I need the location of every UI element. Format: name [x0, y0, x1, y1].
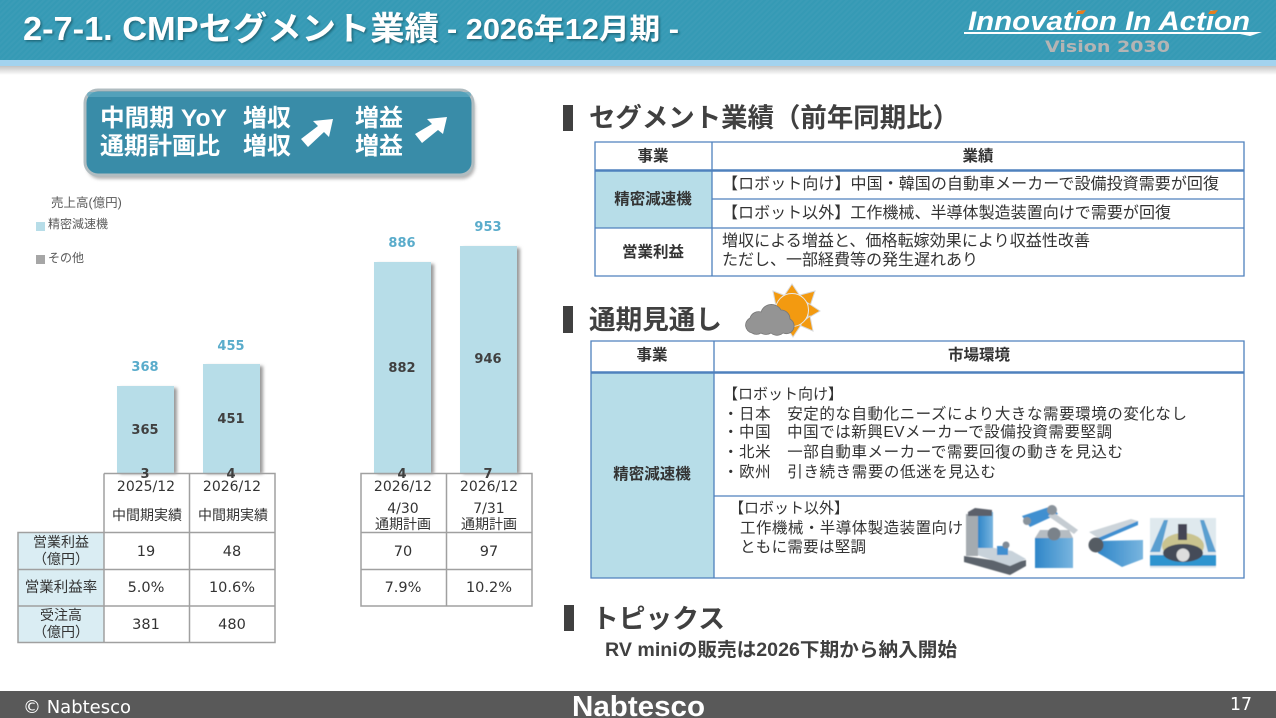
- chart legend: その他: [48, 251, 84, 265]
- table: segment results: 業績: [962, 147, 994, 165]
- footer: 17: [1230, 694, 1252, 715]
- bar chart: full-year plans: 886: [388, 236, 416, 251]
- table: right plans: 2026/12: [374, 479, 432, 495]
- heading: topics: トピックス: [592, 604, 725, 634]
- bar small values: 4: [226, 467, 236, 482]
- table: left results: 10.6%: [209, 580, 255, 596]
- table: right plans: 2026/12: [460, 479, 518, 495]
- bar chart: full-year plans: 953: [474, 220, 502, 235]
- callout: summary of YoY and plan comparison: 増益: [355, 133, 403, 160]
- table: right plans: 通期計画: [375, 516, 431, 532]
- table: right plans: [361, 474, 532, 606]
- table: market environment: 【ロボット向け】: [723, 386, 843, 403]
- table: market environment: 事業: [636, 345, 668, 364]
- table: segment results: [595, 142, 1244, 276]
- bar small values: 7: [483, 467, 493, 482]
- table: segment results: 増収による増益と、価格転嫁効果により収益性改善: [722, 232, 1090, 250]
- heading: full-year outlook: 通期見通し: [589, 305, 722, 335]
- table: market environment: [591, 341, 1244, 578]
- table: left results: 480: [218, 617, 246, 633]
- footer: © Nabtesco: [23, 697, 131, 718]
- table: left results: 中間期実績: [198, 507, 268, 523]
- bar chart: actuals: 451: [217, 412, 245, 427]
- callout: summary of YoY and plan comparison: 中間期 YoY: [100, 105, 227, 132]
- table: left results: [18, 474, 275, 642]
- bar chart: full-year plans: [374, 220, 520, 474]
- table: left results: （億円）: [33, 551, 89, 567]
- table: right plans: 7/31: [473, 501, 505, 517]
- table: left results: 営業利益: [33, 534, 89, 550]
- chart legend: [36, 195, 122, 265]
- heading: segment results: セグメント業績（前年同期比）: [589, 103, 959, 133]
- table: left results: 48: [223, 544, 241, 560]
- table: market environment: ・日本 安定的な自動化ニーズにより大きな需要環境の変化なし: [723, 405, 1187, 423]
- table: segment results: 事業: [637, 146, 669, 165]
- table: right plans: 97: [480, 544, 498, 560]
- table: left results: 2026/12: [203, 479, 261, 495]
- text: RV mini: RV miniの販売は2026下期から納入開始: [605, 639, 957, 661]
- table: right plans: 7.9%: [385, 580, 421, 596]
- title: [23, 10, 679, 47]
- bar chart: actuals: [117, 339, 263, 474]
- table: market environment: 精密減速機: [613, 464, 691, 483]
- table: right plans: 4/30: [387, 501, 419, 517]
- chart legend: 精密減速機: [48, 216, 108, 231]
- arrow: up 2: [415, 117, 447, 143]
- table: left results: 受注高: [40, 607, 82, 623]
- logo: Innovation In Action Vision 2030: Vision 2030: [1045, 37, 1170, 56]
- icon: robot arm: [1022, 505, 1078, 568]
- table: left results: 5.0%: [128, 580, 164, 596]
- table: right plans: 10.2%: [466, 580, 512, 596]
- table: market environment: ・北米 一部自動車メーカーで需要回復の動きを見込む: [723, 443, 1123, 461]
- bar chart: full-year plans: 882: [388, 361, 416, 376]
- icon: turntable: [1150, 518, 1216, 568]
- icon: sun behind cloud: [746, 284, 820, 337]
- arrow: up 1: [301, 119, 333, 147]
- logo: Innovation In Action Vision 2030: [964, 6, 1262, 56]
- footer: [0, 691, 1276, 718]
- bar chart: actuals: 365: [131, 423, 159, 438]
- header band: [0, 0, 1276, 75]
- callout: summary of YoY and plan comparison: 増収: [243, 105, 291, 132]
- bar small values: [140, 467, 493, 482]
- table: left results: 19: [137, 544, 155, 560]
- table: market environment: ・中国 中国では新興EVメーカーで設備投資需要堅調: [723, 423, 1112, 441]
- table: left results: 381: [132, 617, 160, 633]
- table: right plans: 70: [394, 544, 412, 560]
- title: 2-7-1. CMPセグメント業績: [23, 10, 439, 47]
- title: - 2026年12月期 -: [447, 13, 679, 46]
- callout: summary of YoY and plan comparison: 通期計画比: [100, 133, 220, 160]
- chart legend: 売上高(億円): [51, 195, 122, 210]
- bar chart: actuals: 455: [217, 339, 245, 354]
- callout: summary of YoY and plan comparison: 増収: [243, 133, 291, 160]
- table: market environment: 工作機械・半導体製造装置向け: [740, 519, 963, 537]
- table: segment results: 【ロボット以外】工作機械、半導体製造装置向けで需要が回復: [722, 203, 1171, 222]
- bar chart: actuals: 368: [131, 360, 159, 375]
- table: left results: 営業利益率: [25, 579, 97, 596]
- table: left results: 中間期実績: [112, 507, 182, 523]
- table: segment results: 【ロボット向け】中国・韓国の自動車メーカーで設備投資需要が回復: [722, 175, 1219, 193]
- table: segment results: 精密減速機: [614, 189, 692, 208]
- table: market environment: ・欧州 引き続き需要の低迷を見込む: [723, 463, 996, 481]
- callout: summary of YoY and plan comparison: [85, 90, 475, 179]
- table: left results: 2025/12: [117, 479, 175, 495]
- table: market environment: ともに需要は堅調: [740, 538, 866, 556]
- icon: machine tool: [964, 508, 1026, 575]
- table: market environment: 【ロボット以外】: [729, 500, 849, 517]
- logo: Innovation In Action Vision 2030: Innovation In Action: [968, 6, 1250, 36]
- icon: hinged box: [1088, 519, 1143, 567]
- bar small values: 3: [140, 467, 150, 482]
- bar chart: full-year plans: 946: [474, 352, 502, 367]
- table: left results: （億円）: [33, 624, 89, 640]
- table: right plans: 通期計画: [461, 516, 517, 532]
- table: market environment: 市場環境: [948, 345, 1010, 364]
- bar small values: 4: [397, 467, 407, 482]
- table: segment results: 営業利益: [622, 242, 684, 261]
- callout: summary of YoY and plan comparison: 増益: [355, 105, 403, 132]
- table: segment results: ただし、一部経費等の発生遅れあり: [722, 251, 978, 269]
